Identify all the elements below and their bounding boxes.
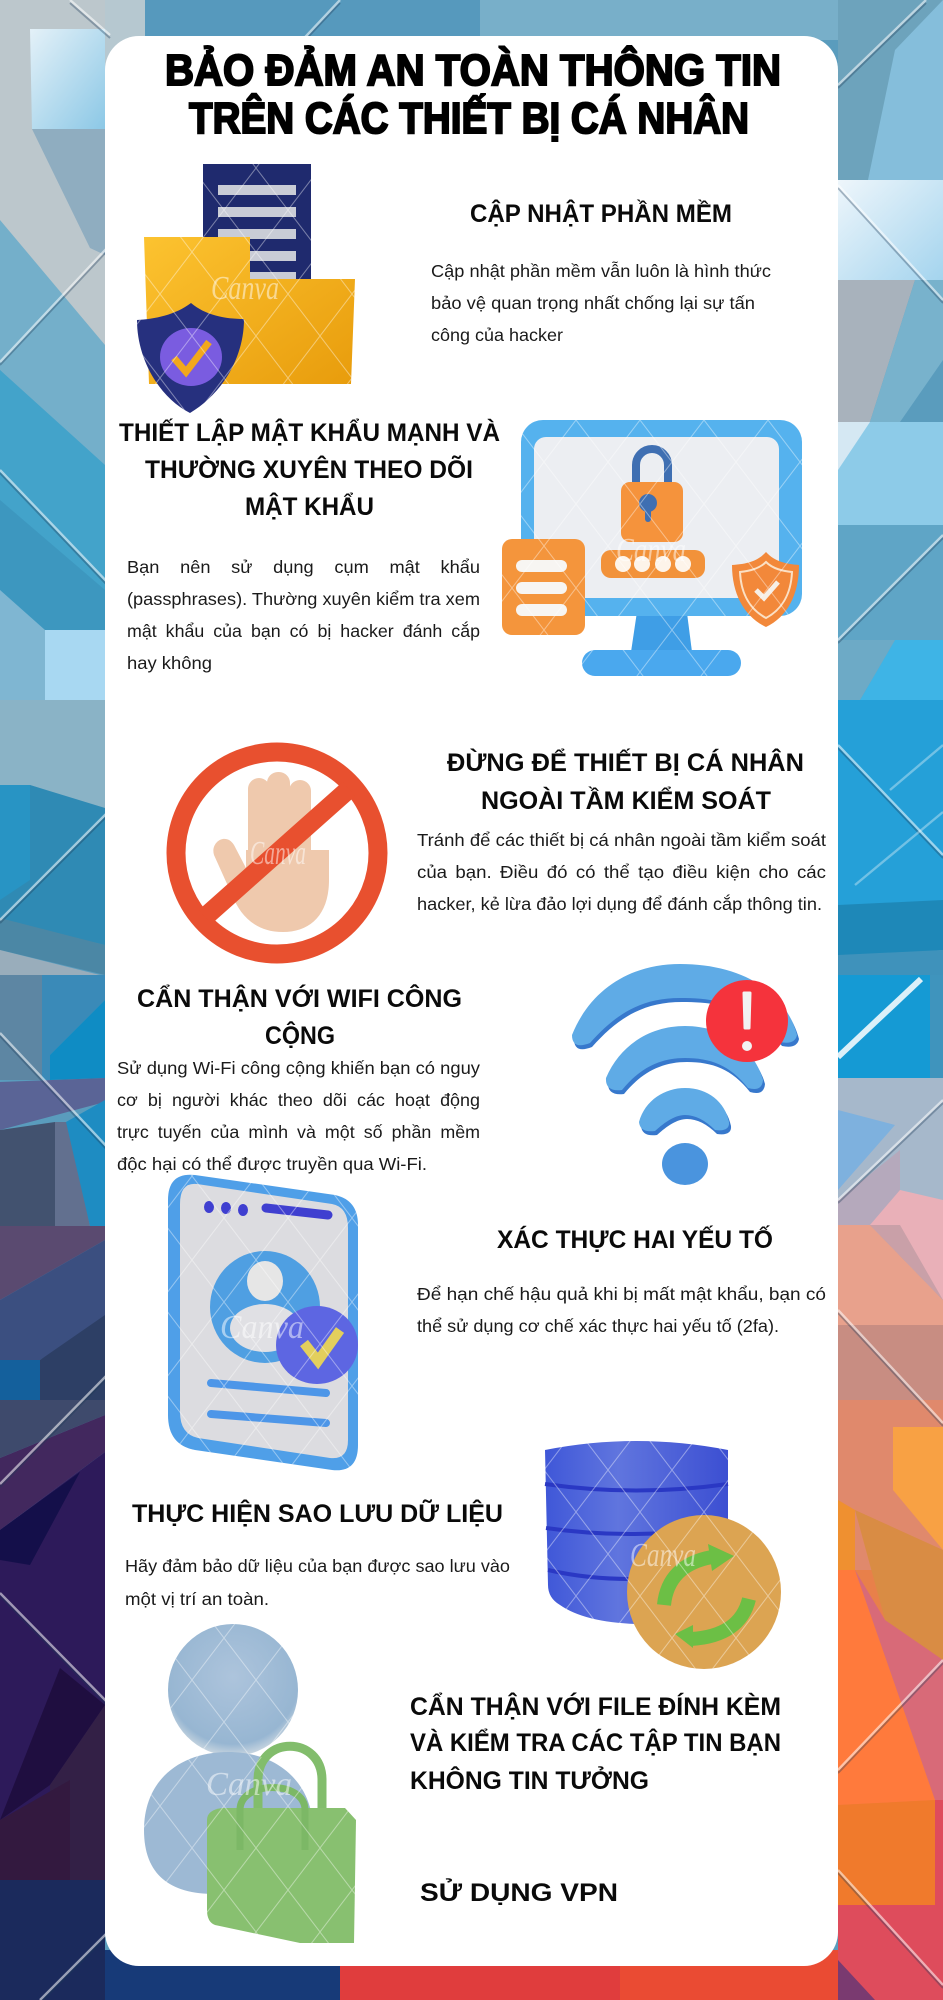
section: data backup xyxy=(125,1441,781,1669)
heading: strong passwords: THIẾT LẬP MẬT KHẨU MẠNH VÀ xyxy=(119,417,500,447)
heading: keep devices in control xyxy=(447,747,804,815)
text: public wifi xyxy=(117,1058,480,1174)
text: two-factor authentication xyxy=(417,1284,826,1336)
section: software update xyxy=(137,164,771,413)
text: public wifi: trực tuyến của mình và một số phần mềm xyxy=(117,1122,480,1142)
icon: person with green bag xyxy=(144,1624,356,1943)
icon: no-entry sign with hand xyxy=(176,752,378,954)
text: strong passwords: hay không xyxy=(127,653,212,673)
title xyxy=(165,44,781,143)
text: keep devices in control: của bạn. Điều đó có thể tạo điều kiện cho các xyxy=(417,862,826,882)
heading: two-factor authentication: XÁC THỰC HAI YẾU TỐ xyxy=(497,1224,773,1254)
section: file attachments xyxy=(144,1624,781,1943)
heading: file attachments: CẨN THẬN VỚI FILE ĐÍNH KÈM xyxy=(410,1691,781,1721)
heading: software update: CẬP NHẬT PHẦN MỀM xyxy=(470,198,732,228)
text: two-factor authentication: Để hạn chế hậu quả khi bị mất mật khẩu, bạn có xyxy=(417,1284,826,1304)
section: public wifi xyxy=(117,964,799,1185)
text: public wifi: Sử dụng Wi-Fi công cộng khiến bạn có nguy xyxy=(117,1058,480,1078)
text: data backup: một vị trí an toàn. xyxy=(125,1589,269,1609)
text: strong passwords: (passphrases). Thường xuyên kiểm tra xem xyxy=(127,589,480,609)
text: software update: Cập nhật phần mềm vẫn luôn là hình thức xyxy=(431,260,771,281)
icon: monitor with padlock: Canva xyxy=(616,532,686,569)
section: strong passwords xyxy=(119,417,802,676)
text: keep devices in control xyxy=(417,830,826,914)
section: keep devices in control xyxy=(176,747,826,954)
title: BẢO ĐẢM AN TOÀN THÔNG TIN xyxy=(165,44,781,95)
heading: keep devices in control: NGOÀI TẦM KIỂM SOÁT xyxy=(481,786,771,815)
text: public wifi: cơ bị người khác theo dõi các hoạt động xyxy=(117,1090,480,1110)
icon: no-entry sign with hand: Canva xyxy=(250,835,306,872)
text: strong passwords xyxy=(127,557,480,673)
heading: keep devices in control: ĐỪNG ĐỂ THIẾT BỊ CÁ NHÂN xyxy=(447,747,804,777)
icon: folder with document and shield: Canva xyxy=(211,270,279,307)
icon: folder with document and shield xyxy=(137,164,355,413)
icon: database with sync arrows: Canva xyxy=(630,1537,696,1574)
heading: public wifi: CỘNG xyxy=(265,1020,335,1050)
text: software update: bảo vệ quan trọng nhất chống lại sự tấn xyxy=(431,293,755,313)
heading: file attachments: KHÔNG TIN TƯỞNG xyxy=(410,1765,649,1795)
heading: data backup: THỰC HIỆN SAO LƯU DỮ LIỆU xyxy=(132,1498,503,1528)
heading: public wifi: CẨN THẬN VỚI WIFI CÔNG xyxy=(137,983,462,1013)
text: data backup xyxy=(125,1556,510,1609)
text: keep devices in control: hacker, kẻ lừa đảo lợi dụng để đánh cắp thông tin. xyxy=(417,893,822,914)
icon: wifi with alert xyxy=(572,964,799,1185)
heading: strong passwords: THƯỜNG XUYÊN THEO DÕI xyxy=(145,454,473,484)
section: two-factor authentication xyxy=(168,1175,826,1473)
heading: file attachments xyxy=(410,1691,781,1795)
text: data backup: Hãy đảm bảo dữ liệu của bạn được sao lưu vào xyxy=(125,1556,510,1576)
text: strong passwords: mật khẩu của bạn có bị hacker đánh cắp xyxy=(127,620,480,641)
icon: database with sync arrows xyxy=(545,1441,781,1669)
text: two-factor authentication: thể sử dụng cơ chế xác thực hai yếu tố (2fa). xyxy=(417,1316,779,1336)
text: strong passwords: Bạn nên sử dụng cụm mật khẩu xyxy=(127,557,480,577)
text: software update xyxy=(431,260,771,345)
heading: public wifi xyxy=(137,983,462,1050)
heading: use VPN: SỬ DỤNG VPN xyxy=(420,1877,618,1907)
icon: phone with profile and check badge: Canva xyxy=(220,1309,304,1346)
text: software update: công của hacker xyxy=(431,325,563,345)
white content panel xyxy=(105,36,838,1966)
icon: person with green bag: Canva xyxy=(206,1766,292,1803)
text: public wifi: độc hại có thể được truyền qua Wi-Fi. xyxy=(117,1154,427,1174)
heading: strong passwords: MẬT KHẨU xyxy=(245,491,374,521)
heading: file attachments: VÀ KIỂM TRA CÁC TẬP TIN BẠN xyxy=(410,1727,781,1757)
text: keep devices in control: Tránh để các thiết bị cá nhân ngoài tầm kiểm soát xyxy=(417,830,826,850)
icon: monitor with padlock xyxy=(502,420,802,676)
title: TRÊN CÁC THIẾT BỊ CÁ NHÂN xyxy=(189,93,749,143)
heading: strong passwords xyxy=(119,417,500,521)
icon: phone with profile and check badge xyxy=(168,1175,358,1473)
